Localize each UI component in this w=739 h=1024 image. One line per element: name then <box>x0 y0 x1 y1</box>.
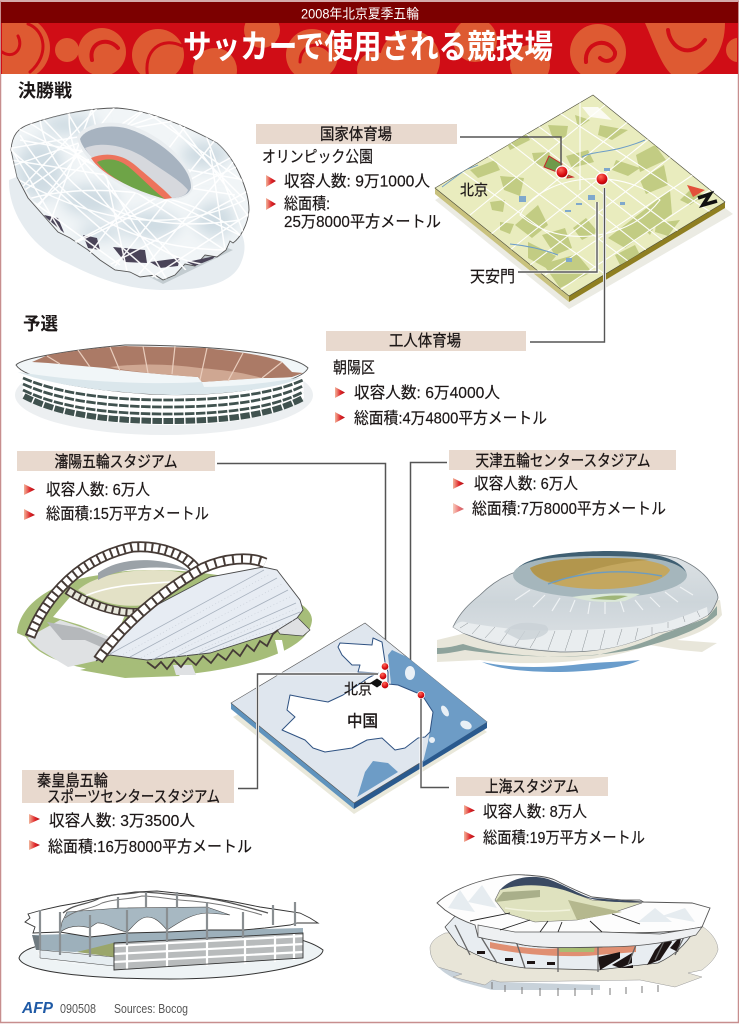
arrow bullet <box>464 805 475 815</box>
seas <box>388 650 487 762</box>
China territory <box>282 638 433 752</box>
pins: stadium locations <box>379 663 425 699</box>
text: 中国: 中国 <box>347 712 378 730</box>
illustration: Tianjin stadium <box>437 551 722 672</box>
footer <box>21 1000 188 1017</box>
header swirl pattern <box>2 23 737 74</box>
arrow bullet <box>453 478 464 489</box>
heading: qualifiers: 予選 <box>23 314 58 334</box>
text: capacity: 収容人数: 6万人 <box>474 475 578 493</box>
heading: final: 決勝戦 <box>18 80 72 101</box>
text: area: 総面積:4万4800平方メートル <box>354 410 547 428</box>
leader: 上海 <box>421 698 449 788</box>
arrow bullet <box>266 175 276 187</box>
roof <box>437 875 710 948</box>
leader: 天津 <box>392 462 447 684</box>
leader: 秦皇島 <box>238 674 378 788</box>
arrow bullet <box>335 387 345 398</box>
text: capacity: 収容人数: 6万4000人 <box>354 384 500 402</box>
truss arches <box>30 547 265 660</box>
label: 上海 <box>456 777 608 796</box>
arrow bullet <box>29 840 40 850</box>
label: 工人体育場: 工人体育場 <box>389 332 461 350</box>
illustration: Shenyang stadium <box>17 547 312 678</box>
label: 瀋陽五輪スタジアム <box>17 451 215 471</box>
arrow bullet <box>335 412 345 423</box>
icon: compass <box>687 185 717 205</box>
arrow bullet <box>266 198 276 210</box>
text: area: 総面積:7万8000平方メートル <box>472 500 666 518</box>
text: area: 25万8000平方メートル <box>284 213 441 231</box>
roof canopy <box>25 891 318 937</box>
illustration: Workers' Stadium <box>15 345 313 435</box>
text: date: 090508 <box>60 1002 96 1016</box>
text: area: 総面積:15万平方メートル <box>46 505 209 523</box>
label: 瀋陽五輪スタジアム: 瀋陽五輪スタジアム <box>54 453 178 471</box>
text: area: 総面積: <box>284 195 330 213</box>
text: 天安門: 天安門 <box>470 268 515 286</box>
arrow bullet <box>24 509 35 520</box>
pin: 工人体育場 <box>596 173 608 185</box>
label: 工人体育場 <box>326 331 526 351</box>
clouds <box>405 666 473 743</box>
text: area: 総面積:16万8000平方メートル <box>48 838 252 856</box>
leader: 天安門 <box>518 202 597 272</box>
header banner <box>1 2 738 74</box>
label: 国家体育場 <box>256 124 457 144</box>
text: area <box>284 195 441 231</box>
leader: 工人体育場 <box>530 188 604 342</box>
text: capacity: 収容人数: 9万1000人 <box>284 172 430 190</box>
label: 国家体育場: 国家体育場 <box>320 126 392 144</box>
wing and shell <box>277 617 310 636</box>
map: Beijing <box>435 95 733 309</box>
Olympic park <box>544 156 573 178</box>
arrow bullet <box>464 831 475 842</box>
arrow bullet <box>453 503 464 514</box>
illustration: Qinhuangdao stadium <box>19 891 323 979</box>
label: 秦皇島: 秦皇島五輪 <box>37 772 108 790</box>
text: district: 朝陽区 <box>333 359 375 377</box>
leader: 国家体育場 <box>460 137 561 168</box>
arrow bullet <box>29 814 40 824</box>
text: capacity: 収容人数: 3万3500人 <box>49 812 195 830</box>
kicker: 2008年北京夏季五輪 <box>301 6 419 22</box>
title: サッカーで使用される競技場 <box>183 28 553 65</box>
text: capacity: 収容人数: 6万人 <box>46 481 150 499</box>
illustration: Shanghai stadium <box>430 875 718 996</box>
stadium bowl <box>77 123 193 200</box>
label: 天津: 天津五輪センタースタジアム <box>476 452 650 470</box>
marker: Beijing <box>370 678 384 688</box>
map label: 北京 <box>460 182 488 199</box>
map: China <box>231 623 487 814</box>
pin: 国家体育場 <box>556 166 568 178</box>
leader: 瀋陽 <box>217 464 386 664</box>
arrow bullet <box>24 484 35 495</box>
logo: AFP: AFP <box>21 1000 53 1017</box>
illustration: Bird's Nest stadium <box>0 100 255 290</box>
text: location: オリンピック公園 <box>262 148 373 166</box>
text: area: 総面積:19万平方メートル <box>483 829 645 847</box>
label: 秦皇島 <box>22 770 234 806</box>
text: source: Sources: Bocog <box>114 1002 188 1016</box>
label: 上海: 上海スタジアム <box>485 778 579 796</box>
label: 秦皇島: スポーツセンタースタジアム <box>47 788 220 806</box>
text: capacity: 収容人数: 8万人 <box>483 803 587 821</box>
text: 北京: 北京 <box>344 681 372 698</box>
